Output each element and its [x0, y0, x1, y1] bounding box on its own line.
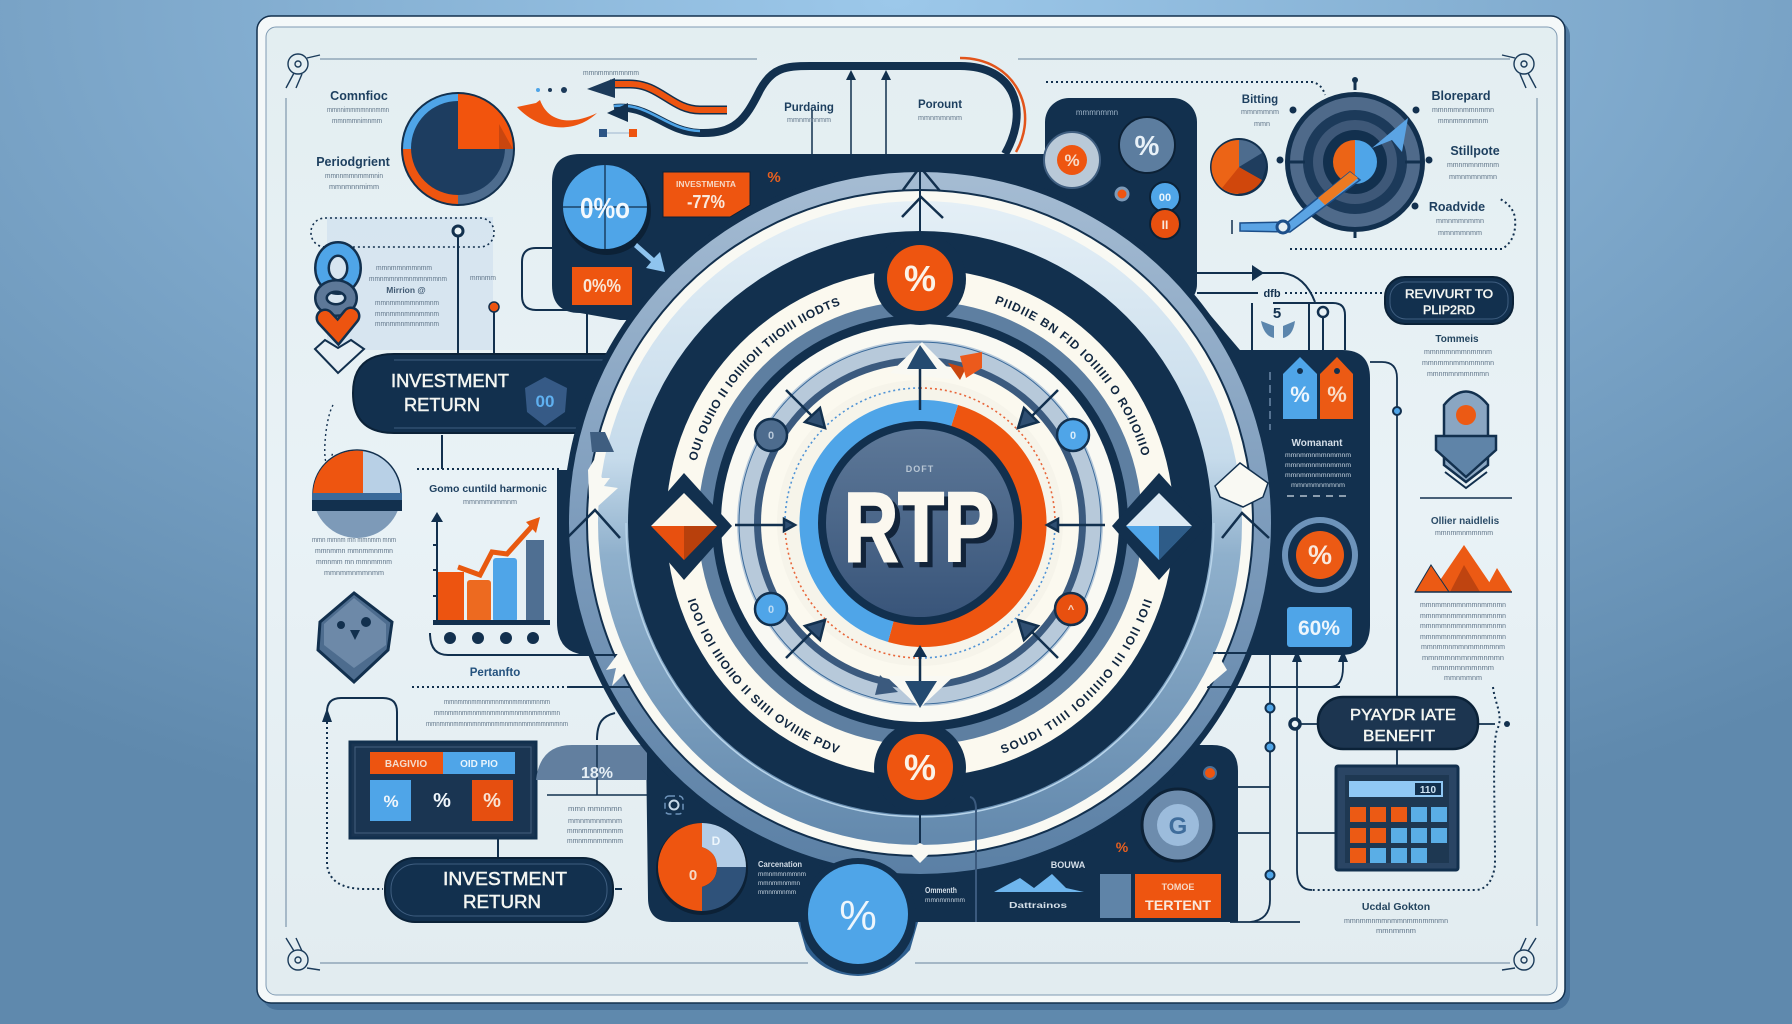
text block: terms: Tommeis: [1435, 334, 1479, 345]
badge: right percent: [1282, 517, 1358, 593]
text: top centre labels: mmnmmnmm: [787, 117, 831, 124]
text + mountain icon: right: Ollier naidlelis: [1431, 516, 1500, 527]
text block: right panel: [1285, 438, 1351, 496]
badge: bottom percent: [874, 722, 966, 814]
navy ring shoulder: [1190, 303, 1245, 356]
icons: top right panel: %: [1135, 130, 1160, 161]
icons: top right panel: mmmnmmn: [1076, 108, 1118, 117]
central ring diagram: [567, 172, 1340, 874]
text block: left column: mmnmmnmmnmmnm: [375, 321, 439, 328]
text block: gauge labels: mmnmmnmmnmmn: [1432, 107, 1494, 114]
label: orange top: INVESTMENTA: [676, 179, 736, 189]
tags: percent: %: [1290, 382, 1310, 407]
pie chart: bottom panel: 0: [689, 867, 697, 884]
text block: top left labels: Comnfioc: [330, 89, 388, 103]
text block: right panel: Womanant: [1292, 438, 1343, 449]
text block: terms: mmnmmnmmnmmn: [1427, 371, 1489, 378]
text: top centre labels: mmnmmnmmnmm: [583, 70, 639, 77]
text block: gauge labels: Roadvide: [1429, 200, 1485, 214]
label: orange box: [572, 267, 632, 305]
table panel: OID PIO: [460, 759, 498, 770]
text block: top left labels: mmnnimmmmnnnmmn: [327, 107, 389, 114]
bar chart: [430, 512, 630, 655]
curved band text: IOOI IOI IIIOIIO II SIIII OVIIIE PDVE: [688, 598, 840, 753]
pill: investment return top: RETURN: [404, 395, 480, 415]
text block: gauge labels: mmnmmnmmnm: [1438, 118, 1488, 125]
icons: top right panel: 00: [1159, 192, 1171, 204]
text + mountain icon: right: mmnmmnmmnmm: [1432, 665, 1494, 672]
text block: gauge labels: Blorepard: [1431, 89, 1491, 103]
badge: grey coin: %: [1116, 839, 1129, 855]
label: orange top: -77%: [687, 192, 725, 212]
lower right notch: [1207, 653, 1340, 687]
small nodes: inner ring: 0: [1070, 430, 1076, 442]
blue circle: top left panel: [563, 165, 665, 272]
blue circle: top left panel: 0%o: [580, 193, 630, 225]
icons: top right panel: [1044, 108, 1180, 239]
pill: investment return bottom: INVESTMENT: [443, 869, 567, 889]
connectors: right upper: 5: [1273, 305, 1281, 322]
pill: player rate benefit: BENEFIT: [1363, 728, 1435, 745]
text block: left column: mmnmmnmmnmmnm: [375, 311, 439, 318]
label: 60 percent: [1287, 607, 1352, 647]
pie chart: bottom panel: [656, 823, 748, 915]
tab: 18 percent: mmnmmnmmnm: [568, 818, 622, 825]
table panel: %: [433, 790, 451, 812]
text block: under dome: mmnmmn mmnmmnmmn: [315, 548, 393, 555]
text + mountain icon: right: mmnmmnmmnmmnmmnm: [1421, 644, 1505, 651]
mini mountain chart: Dattrainos: [1009, 900, 1067, 910]
pill: investment return bottom: [385, 858, 613, 922]
arrows: inner ring: [735, 342, 1105, 708]
text: top centre labels: [583, 70, 962, 124]
text block: gauge labels: mmnmmnmmn: [1436, 218, 1484, 225]
text block: top left labels: mmnmmnimnmm: [332, 118, 382, 125]
pie chart: small right: [1210, 138, 1268, 196]
curved band text: SOUDI TIIII IOIIIIIIO III IOII IOIIII: [1000, 599, 1152, 753]
label: 60 percent: 60%: [1298, 617, 1340, 640]
icon: shield: [525, 377, 567, 426]
calculator: 110: [1420, 785, 1437, 796]
text block: bottom right: mmnmmnmmnmmnmmnmmnmn: [1344, 918, 1448, 925]
pill: revenue to player: [1385, 277, 1513, 324]
panel: top right: [1045, 98, 1197, 308]
arrows: top flow: [517, 58, 1025, 175]
label: orange top: %: [767, 169, 781, 186]
text block: portfolio note: mmnmmnmmnmmnmmnmmnmmnmm: [444, 699, 550, 706]
text block: gauge labels: mmnmmnmm: [1438, 230, 1482, 237]
text + mountain icon: right: mmnmmnmmnmmnmmnmn: [1420, 613, 1506, 620]
text block: top left labels: [316, 89, 391, 191]
text block: right panel: mmnmmnmmnmmnm: [1285, 452, 1351, 459]
text: top centre labels: Purdaing: [784, 102, 834, 114]
badge: right percent: %: [1308, 540, 1332, 570]
text block: right panel: mmnmmnmmnm: [1291, 482, 1345, 489]
circle: blue percent: [798, 858, 918, 976]
centre hub: RTP: RTP: [844, 472, 994, 582]
text block: right panel: mmnmmnmmnmmnm: [1285, 462, 1351, 469]
text block: gauge labels: [1241, 89, 1500, 237]
text block: terms: mmnmmnmmnmmnmn: [1422, 360, 1494, 367]
tags: percent: [1270, 357, 1353, 430]
text block: left column: mmnmm: [470, 275, 496, 282]
text block: gauge labels: mmn: [1254, 121, 1270, 128]
icon: hex badge: [318, 593, 392, 682]
text block: under dome: mmn mmnm mn mmnmm mnm: [312, 537, 396, 544]
text + mountain icon: right: mmnmmnmmnmm: [1435, 530, 1493, 537]
icons: top right panel: II: [1162, 218, 1168, 232]
text block: under dome: [312, 537, 396, 577]
text block: terms: mmnmmnmmnmmnm: [1424, 349, 1492, 356]
connector: left dotted route: [322, 698, 622, 889]
tab: 18 percent: mmnmmnmmnmm: [567, 838, 623, 845]
text block: bottom panel left: mmnmmnmm: [925, 897, 965, 904]
text + mountain icon: right: mmnmmnmmnmmnmmn: [1422, 655, 1504, 662]
badge: top percent: %: [904, 258, 936, 299]
badge: top percent: [874, 233, 966, 325]
small nodes: inner ring: 0: [768, 604, 774, 616]
table panel: %: [383, 792, 399, 811]
text + mountain icon: right: mmnmmnmmnmmnmmnmn: [1420, 623, 1506, 630]
heading: chart: Gomo cuntild harmonic: [429, 483, 547, 495]
text block: gauge labels: Stillpote: [1450, 144, 1500, 158]
centre progress ring: [799, 400, 1047, 647]
centre hub: RTP: DOFT: [906, 464, 934, 474]
pill: revenue to player: PLIP2RD: [1423, 303, 1475, 317]
text block: bottom right: [1344, 901, 1448, 935]
panel: bottom: [646, 745, 1238, 922]
text block: top left labels: mmnmnnmimm: [329, 184, 379, 191]
text block: bottom panel left: mmnmmnmmnm: [758, 871, 806, 878]
text block: left column: mmnmmnmmnmmnmmnm: [369, 276, 447, 283]
panel: right: [1180, 350, 1370, 655]
dotted callout frame: left: [311, 217, 494, 350]
centre hub: RTP: RTP: [849, 477, 999, 587]
tab: 18 percent: mmnmmnmmnmm: [567, 828, 623, 835]
badge: grey coin: G: [1169, 813, 1187, 840]
icon: marker pin: [948, 352, 982, 380]
text block: left column: mmnmmnmmnmm: [376, 265, 432, 272]
tags: percent: %: [1327, 382, 1347, 407]
icon: chain: [315, 249, 364, 373]
text block: gauge labels: mmnmmnmmnm: [1447, 162, 1499, 169]
text block: right panel: mmnmmnmmnmmnm: [1285, 472, 1351, 479]
lower left notch: [567, 648, 630, 687]
curved band text: [688, 296, 1152, 753]
small nodes: inner ring: 0: [768, 430, 774, 442]
centre hub: RTP: [818, 421, 1022, 625]
icon: half dome: [312, 450, 402, 538]
text block: left column: mmnmmnmmnmmnm: [375, 300, 439, 307]
text: top centre labels: Porount: [918, 99, 962, 111]
corner ornaments: [286, 54, 1536, 970]
text block: under dome: mmnmm mn mmnmmnm: [316, 559, 392, 566]
text block: bottom right: Ucdal Gokton: [1362, 901, 1430, 913]
text block: left column: [369, 265, 496, 328]
connectors: right lower: [1210, 362, 1510, 922]
icons: top right panel: %: [1064, 151, 1080, 170]
tab: 18 percent: mmn mmnmmn: [568, 806, 622, 813]
label: orange testimant: TOMOE: [1162, 882, 1194, 892]
text block: bottom panel left: [758, 860, 965, 904]
table panel: BAGIVIO: [385, 759, 427, 770]
text block: gauge labels: mmnmmnm: [1241, 109, 1279, 116]
text block: portfolio note: Pertanfto: [470, 667, 520, 679]
tab: 18 percent: [536, 745, 647, 845]
text block: portfolio note: [412, 667, 632, 728]
text block: terms: [1422, 334, 1494, 378]
text block: left column: Mirrion @: [386, 285, 426, 295]
text block: bottom right: mmnmmnm: [1376, 928, 1416, 935]
badge: bottom percent: %: [904, 747, 936, 788]
table panel: [350, 742, 536, 838]
right star: [1215, 463, 1269, 538]
pill: player rate benefit: PYAYDR IATE: [1350, 707, 1456, 724]
connector loop: [522, 248, 587, 397]
text block: gauge labels: mmnmmnmmn: [1449, 174, 1497, 181]
mini mountain chart: [994, 860, 1086, 910]
mini mountain chart: BOUWA: [1051, 860, 1086, 870]
curved band text: OUI OUIIO II IOIIIIOII TIIOIII IIODTS: [689, 298, 840, 460]
label: orange testimant: TERTENT: [1145, 897, 1211, 913]
text block: gauge labels: Bitting: [1242, 94, 1278, 106]
tab: 18 percent: 18%: [581, 765, 613, 782]
text + mountain icon: right: mmnmmnmmnmmnmmnmn: [1420, 634, 1506, 641]
pill: player rate benefit: [1318, 697, 1478, 749]
text block: bottom panel left: mmnmmnmm: [758, 889, 796, 896]
main card: [257, 16, 1570, 1010]
pie chart: top left: [401, 92, 515, 206]
pill: investment return top: [353, 354, 660, 433]
text block: bottom panel left: mmnmmnmmn: [758, 880, 800, 887]
heading: chart: [429, 483, 547, 506]
diamond: left: [638, 473, 732, 580]
panel: top left: [522, 154, 1060, 397]
icon: small ring node: [665, 796, 683, 814]
icon: shield: 00: [536, 392, 554, 411]
text + mountain icon: right: mmnmmnm: [1444, 675, 1482, 682]
top chevrons: [902, 167, 943, 218]
text block: under dome: mmnmmnmmnmm: [324, 570, 384, 577]
circle: blue percent: %: [839, 892, 877, 939]
small nodes: inner ring: ^: [1068, 604, 1075, 616]
pill: investment return top: INVESTMENT: [391, 371, 509, 391]
pie chart: bottom panel: D: [712, 834, 721, 848]
bottom notch: [907, 843, 933, 863]
diamond: right: [1112, 473, 1207, 580]
pill: investment return bottom: RETURN: [463, 892, 541, 912]
calculator: [1336, 766, 1458, 870]
left navy support behind ring: [557, 470, 760, 655]
shield icon: right: [1420, 392, 1512, 498]
connectors: right upper: dfb: [1263, 288, 1281, 300]
chevrons on outer ring: [567, 167, 1340, 863]
left star: [568, 432, 620, 538]
text block: portfolio note: mmnmmnmmnmmnmmnmmnmmnmmnmmn: [434, 710, 560, 717]
badge: grey coin: [1116, 767, 1216, 861]
label: orange top: [663, 169, 781, 217]
table panel: %: [483, 790, 501, 812]
gauge: [1232, 77, 1432, 238]
heading: chart: mmnmmnmmnm: [463, 499, 517, 506]
connectors: left column: [325, 226, 560, 469]
connectors: right upper: [1167, 240, 1385, 385]
dotted ring: [785, 388, 1055, 658]
text: top centre labels: mmnmmnmm: [918, 115, 962, 122]
text block: bottom panel left: Ommenth: [925, 886, 957, 895]
text block: portfolio note: mmnmmnmmnmmnmmnmmnmmnmmnmmnmmnm: [426, 721, 568, 728]
curved band text: PIIDIIE BN FID IOIIIIII O ROIIOIIIO: [995, 296, 1150, 455]
label: orange box: 0%%: [583, 276, 621, 296]
small nodes: inner ring: [755, 419, 1089, 625]
text block: top left labels: mmnnmmnmmmnin: [325, 173, 383, 180]
label: orange testimant: [1100, 874, 1221, 918]
text block: bottom panel left: Carcenation: [758, 860, 802, 869]
text + mountain icon: right: [1415, 516, 1512, 682]
text + mountain icon: right: mmnmmnmmnmmnmmnmn: [1420, 602, 1506, 609]
dotted frame: gauge group: [1046, 82, 1515, 249]
bottom panel right: vertical: [970, 797, 976, 922]
pill: revenue to player: REVIVURT TO: [1405, 287, 1493, 301]
text block: top left labels: Periodgrient: [316, 155, 391, 169]
